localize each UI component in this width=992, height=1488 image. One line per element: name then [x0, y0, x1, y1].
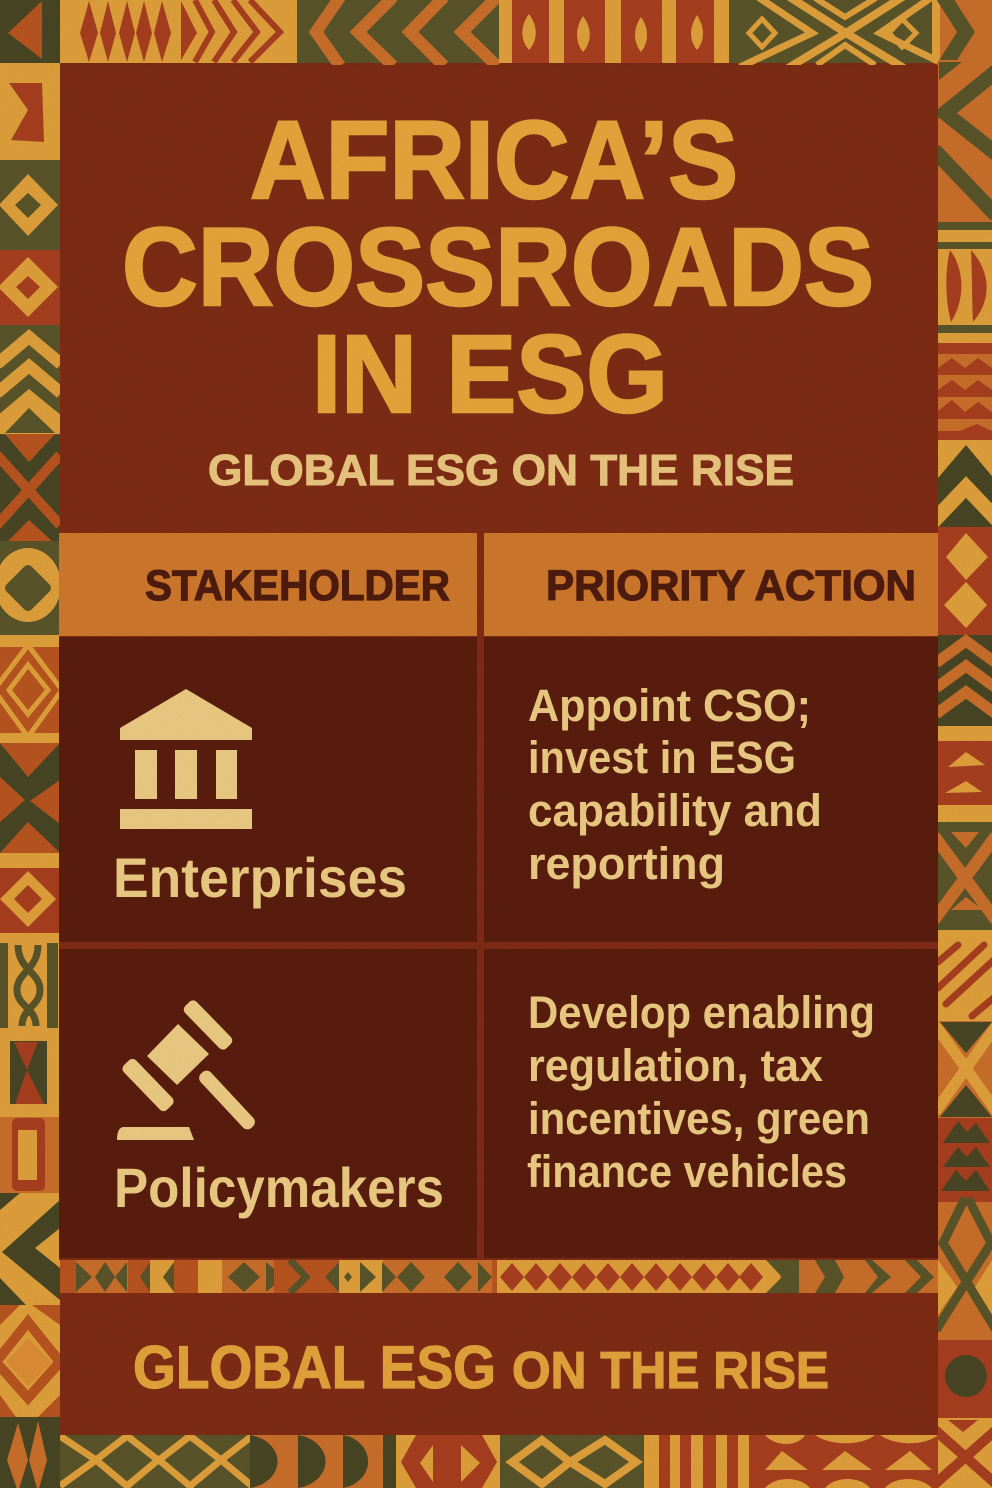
row 1: enterprises: [59, 637, 477, 942]
table header: priority action: PRIORITY ACTION: [546, 562, 916, 610]
table: [59, 533, 938, 1260]
title: CROSSROADS: [122, 206, 874, 329]
pattern band above footer: [60, 1260, 938, 1293]
footer text: ON THE RISE: [512, 1342, 829, 1400]
border: top pattern strip: [0, 0, 992, 68]
label: policymakers: Policymakers: [114, 1156, 444, 1219]
footer text: [133, 1334, 829, 1401]
title: [122, 99, 874, 436]
row 1: action: [484, 637, 938, 942]
border: bottom pattern strip: [60, 1435, 940, 1488]
icon: gavel: [117, 998, 257, 1140]
border: right pattern strip: [938, 60, 992, 1488]
row 1: action: invest in ESG: [528, 732, 796, 783]
row 2: action: [484, 949, 938, 1258]
row 2: action: finance vehicles: [527, 1146, 847, 1197]
row 1: action: Appoint CSO;: [528, 680, 811, 731]
border: left pattern strip: [0, 65, 62, 1488]
icon: classical building: [120, 689, 252, 829]
row 2: action: regulation, tax: [528, 1040, 823, 1091]
row 2: action: Develop enabling: [528, 987, 875, 1038]
title: AFRICA’S: [250, 99, 738, 222]
row 1: action: reporting: [528, 838, 725, 889]
label: enterprises: Enterprises: [113, 846, 407, 909]
title: IN ESG: [312, 313, 668, 436]
table header: stakeholder: STAKEHOLDER: [145, 562, 450, 610]
table header: priority action: [484, 533, 938, 636]
row 2: policymakers: [59, 949, 477, 1258]
footer text: GLOBAL ESG: [133, 1334, 496, 1401]
title panel: [60, 65, 938, 533]
row 2: action: incentives, green: [528, 1093, 870, 1144]
table header: stakeholder: [59, 533, 477, 636]
footer panel: [60, 1293, 938, 1435]
row 1: action: capability and: [528, 785, 822, 836]
subtitle: GLOBAL ESG ON THE RISE: [208, 446, 794, 495]
